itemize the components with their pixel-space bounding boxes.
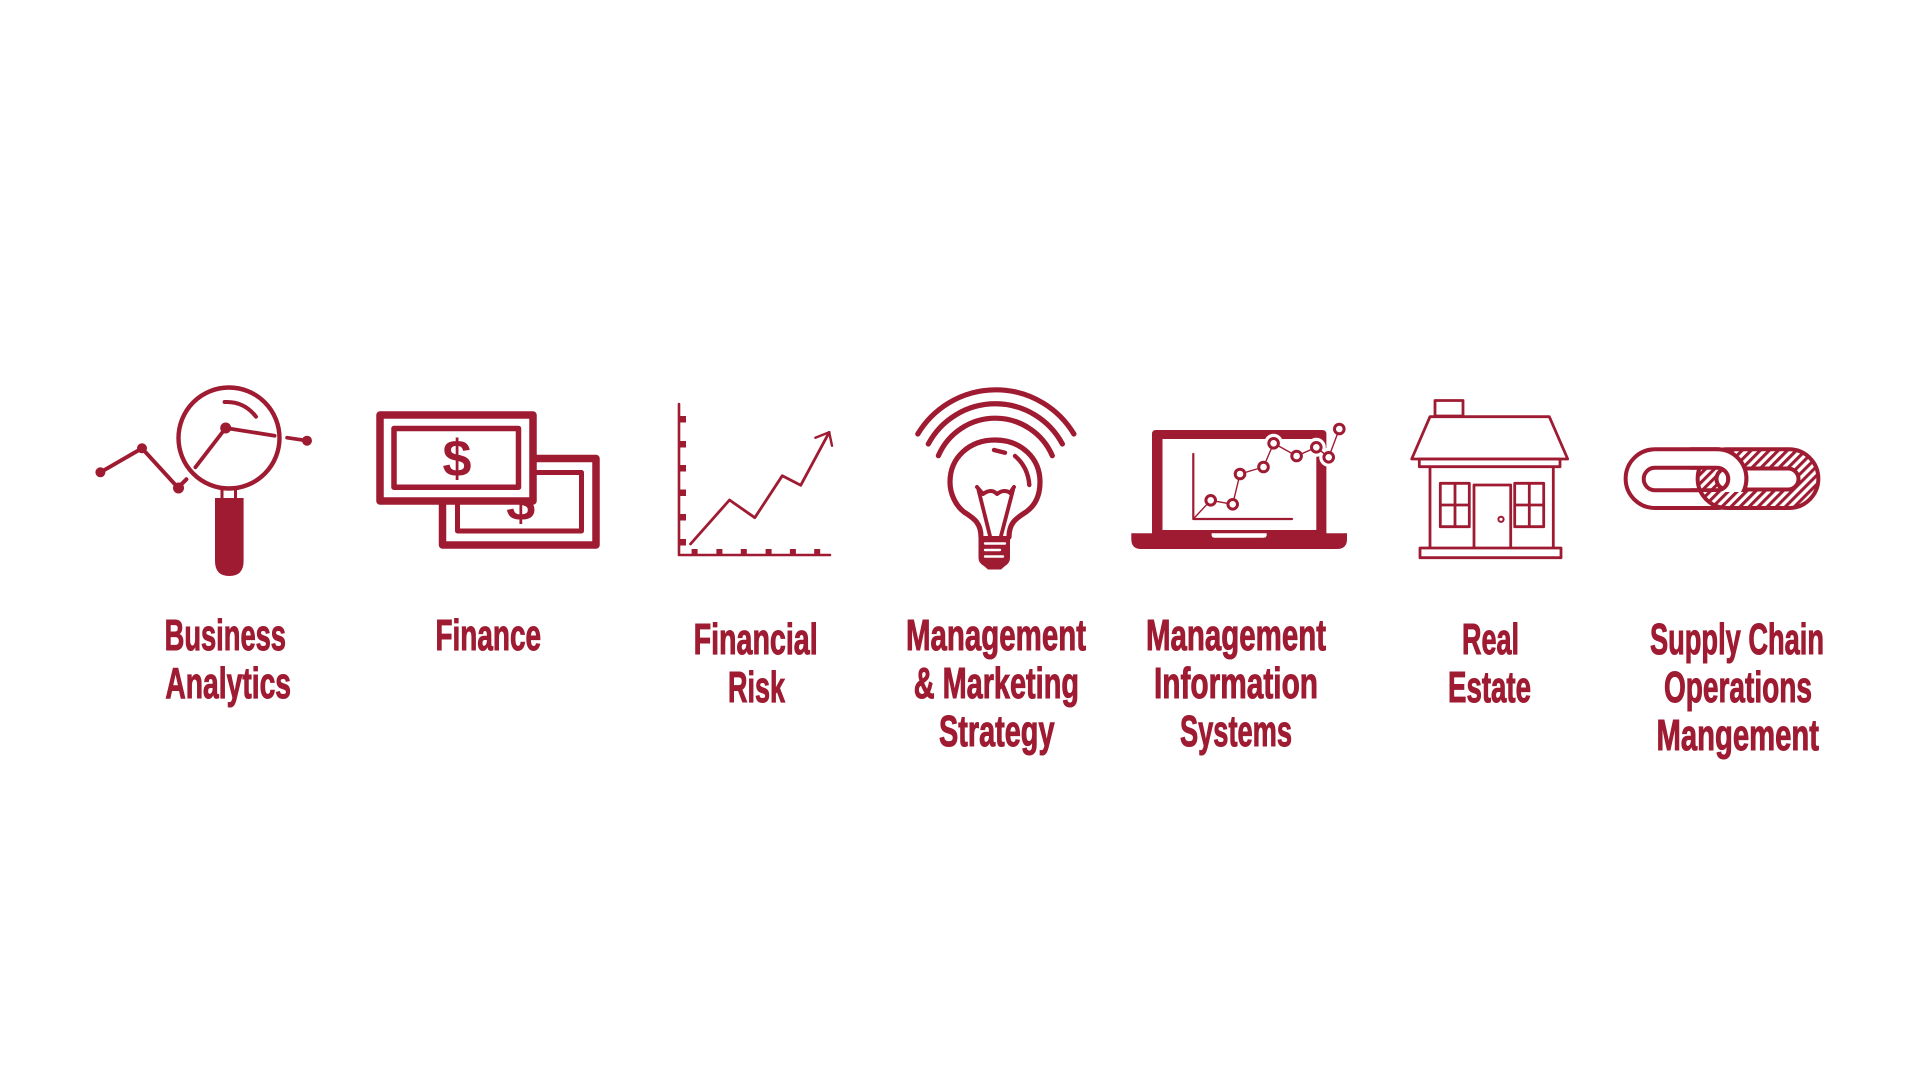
icon: house — [1412, 400, 1568, 558]
icon: laptop with chart — [1131, 424, 1347, 549]
label: Management & Marketing Strategy: Management — [906, 612, 1086, 660]
label: Management Information Systems: Management — [1146, 612, 1326, 660]
icon: magnifying glass over line chart — [95, 388, 312, 576]
label: Supply Chain Operations Mangement: Supply Chain — [1650, 616, 1824, 664]
label: Business Analytics: Business — [165, 612, 286, 660]
label: Financial Risk — [694, 616, 818, 712]
label: Supply Chain Operations Mangement: Mangement — [1656, 712, 1819, 760]
label: Real Estate: Real — [1462, 616, 1519, 664]
label: Business Analytics — [165, 612, 291, 708]
icon: rising line chart — [679, 404, 832, 555]
label: Management & Marketing Strategy — [906, 612, 1086, 756]
label: Real Estate: Estate — [1448, 664, 1531, 712]
label: Financial Risk: Financial — [694, 616, 818, 664]
label: Management & Marketing Strategy: & Marketing — [914, 660, 1079, 708]
icon: chain links — [1626, 449, 1818, 508]
label: Finance: Finance — [436, 612, 541, 660]
icon: light bulb with signal arcs — [918, 390, 1074, 570]
icon: dollar bills — [380, 415, 596, 545]
icon: dollar bills: $ — [443, 430, 472, 488]
label: Management & Marketing Strategy: Strategy — [939, 708, 1054, 756]
label: Management Information Systems — [1146, 612, 1326, 756]
icon: dollar bills: $ — [506, 474, 535, 532]
label: Supply Chain Operations Mangement: Operations — [1664, 664, 1812, 712]
label: Management Information Systems: Information — [1154, 660, 1318, 708]
label: Management Information Systems: Systems — [1180, 708, 1292, 756]
label: Real Estate — [1448, 616, 1531, 712]
label: Business Analytics: Analytics — [165, 660, 291, 708]
label: Financial Risk: Risk — [728, 664, 785, 712]
label: Supply Chain Operations Mangement — [1650, 616, 1824, 760]
